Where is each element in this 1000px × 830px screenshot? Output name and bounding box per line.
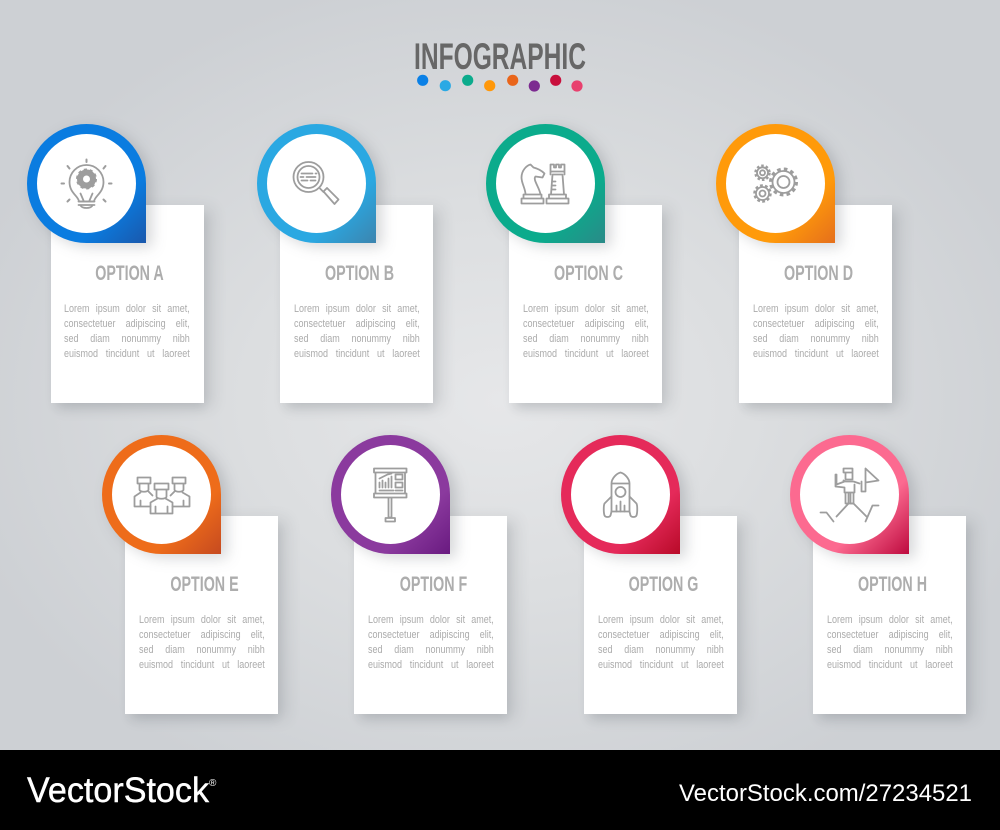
body text: consectetuer adipiscing elit, [64,318,190,330]
body text: sed diam nonummy nibh [294,333,419,345]
panel: option D [716,124,903,413]
icon: climber with flag [820,468,878,522]
body text: Lorem ipsum dolor sit amet, [138,614,264,626]
body text [752,303,879,360]
body text: Lorem ipsum dolor sit amet, [752,303,878,315]
option title: OPTION E [170,573,238,596]
option title: OPTION H [858,573,927,596]
body text: Lorem ipsum dolor sit amet, [523,303,648,315]
body text: sed diam nonummy nibh [138,644,264,656]
option title: OPTION B [324,262,394,285]
body text: consectetuer adipiscing elit, [598,629,723,641]
body text: euismod tincidunt ut laoreet [523,348,648,360]
body text: euismod tincidunt ut laoreet [368,659,493,671]
body text: euismod tincidunt ut laoreet [752,348,878,360]
footer bar [26,771,972,810]
panel: option F [331,434,518,724]
body text: Lorem ipsum dolor sit amet, [294,303,419,315]
body text [598,614,724,671]
body text: sed diam nonummy nibh [523,333,648,345]
option title: OPTION G [628,573,698,596]
pin with gears icon [716,124,846,252]
panel: option E [102,434,290,724]
body text: sed diam nonummy nibh [368,644,493,656]
icon: presentation board [374,468,406,522]
body text: Lorem ipsum dolor sit amet, [827,614,952,626]
panel: option C [486,123,674,414]
body text: consectetuer adipiscing elit, [523,318,648,330]
icon: rocket [603,472,637,517]
body text: euismod tincidunt ut laoreet [827,659,952,671]
panel: option H [790,434,976,724]
option title: OPTION A [95,262,164,285]
icon: gears [754,166,796,202]
body text [523,303,649,360]
body text [64,303,190,360]
body text: consectetuer adipiscing elit, [368,629,493,641]
option title: OPTION F [399,573,467,596]
body text: sed diam nonummy nibh [827,644,952,656]
pin with team icon [102,434,232,564]
pin with lightbulb icon [27,124,158,252]
body text: euismod tincidunt ut laoreet [294,348,419,360]
icon: lightbulb with gear [62,160,112,208]
body text [827,614,953,671]
panel: option B [257,124,444,414]
body text: consectetuer adipiscing elit, [752,318,878,330]
panel: option A [27,124,216,413]
body text [368,614,494,671]
body text: Lorem ipsum dolor sit amet, [64,303,190,315]
body text: Lorem ipsum dolor sit amet, [368,614,493,626]
body text: euismod tincidunt ut laoreet [598,659,723,671]
colored dots [417,75,583,92]
body text: euismod tincidunt ut laoreet [138,659,264,671]
body text: consectetuer adipiscing elit, [138,629,264,641]
icon: magnifier [293,162,338,204]
body text [138,614,265,671]
body text: consectetuer adipiscing elit, [294,318,419,330]
icon: team of three [134,478,189,514]
pin with presentation board icon [331,434,462,564]
option title: OPTION D [783,262,853,285]
footer logo registered mark: ® [209,778,217,789]
body text: sed diam nonummy nibh [752,333,878,345]
pin with magnifier icon [257,124,388,252]
icon: chess pieces [521,164,568,204]
footer logo text: VectorStock [27,771,209,810]
pin with chess icon [486,123,616,252]
footer url text: VectorStock.com/27234521 [679,780,972,807]
body text: Lorem ipsum dolor sit amet, [598,614,723,626]
panel: option G [561,434,748,724]
option title: OPTION C [554,262,623,285]
pin with climber icon [790,434,920,564]
body text: sed diam nonummy nibh [598,644,723,656]
body text: consectetuer adipiscing elit, [827,629,952,641]
pin with rocket icon [561,434,692,564]
body text [294,303,420,360]
body text: sed diam nonummy nibh [64,333,190,345]
body text: euismod tincidunt ut laoreet [64,348,190,360]
main title with dots [414,35,586,92]
